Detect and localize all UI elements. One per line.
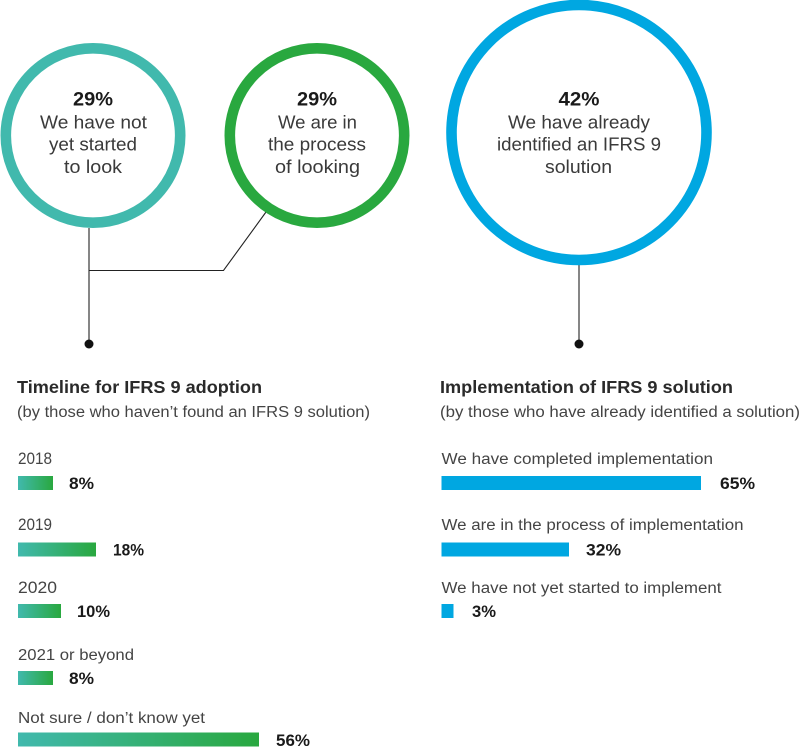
circle: in the process of looking: We are in [278,112,357,132]
bar: 2020 [18,578,110,621]
heading: timeline: Timeline for IFRS 9 adoption [17,377,262,397]
bar: 2021 or beyond: 2021 or beyond [18,647,134,664]
bar: completed: 65% [720,475,755,493]
circle: in the process of looking [230,48,404,223]
circle: already identified a solution: We have already [508,112,651,132]
bar: 2021 or beyond: 8% [69,670,94,688]
circle: in the process of looking: the process [268,134,366,154]
bar: 2020: 2020 [18,578,57,597]
bar: in process [442,517,744,560]
bar: completed [442,451,755,493]
bar: 2019: 18% [113,542,144,560]
bar: not started: We have not yet started to implement [442,580,722,597]
circle: not yet started to look: yet started [49,134,137,154]
bar: 2018: 8% [69,475,94,493]
panel: timeline for IFRS 9 adoption [17,377,370,747]
connector: left circles to timeline [84,212,266,348]
subheading: timeline: (by those who haven’t found an IFRS 9 solution) [17,404,370,421]
bar: 2021 or beyond [18,647,134,688]
subheading: implementation: (by those who have already identified a solution) [440,404,800,421]
circle: already identified a solution: identified an IFRS 9 [497,134,661,154]
circle: already identified a solution [452,5,706,260]
bar: not sure [18,710,310,747]
circle: in the process of looking: 29% [297,90,337,110]
bar: not started [442,580,722,621]
bar: completed: We have completed implementation [442,451,713,468]
connector: right circle to implementation [574,264,584,348]
circle: in the process of looking: of looking [275,156,360,177]
panel: implementation of IFRS 9 solution [440,377,800,621]
circle: not yet started to look [6,48,180,223]
bar: in process: 32% [586,542,621,560]
bar: 2018 [18,449,94,493]
circle: not yet started to look: We have not [40,112,147,132]
circle: already identified a solution: solution [545,156,612,177]
circle: not yet started to look: 29% [73,90,113,110]
bar: 2018: 2018 [18,449,52,468]
circle: already identified a solution: 42% [558,90,600,110]
bar: not sure: Not sure / don’t know yet [18,710,206,727]
bar: not started: 3% [472,603,496,621]
bar: 2019: 2019 [18,515,52,534]
bar: 2020: 10% [77,603,110,621]
bar: in process: We are in the process of implementation [442,517,744,534]
bar: 2019 [18,515,144,560]
heading: implementation: Implementation of IFRS 9 solution [440,377,733,397]
circle: not yet started to look: to look [64,156,123,177]
